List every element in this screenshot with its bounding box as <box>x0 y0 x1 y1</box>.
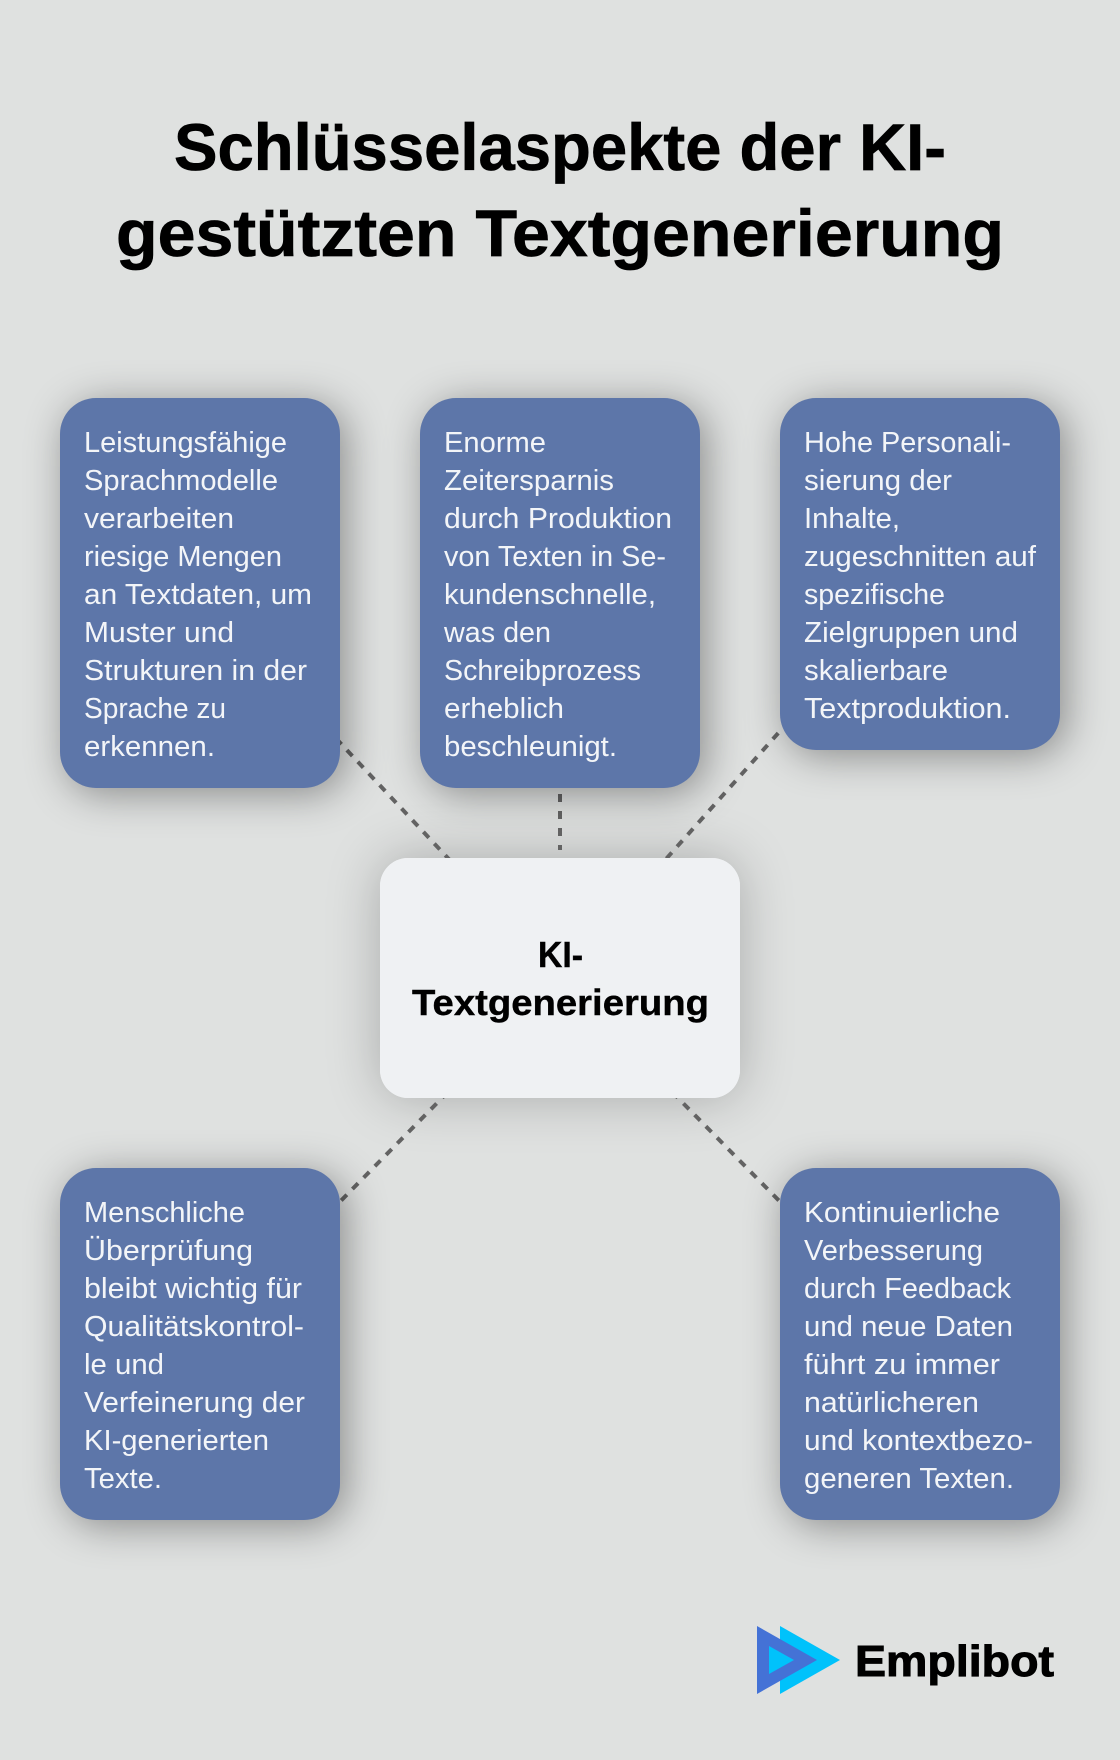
panel: Sprachmodelle: riesige Mengen <box>84 541 282 573</box>
panel: Kontinuierliche Verbesserung: und neue Daten <box>804 1311 1013 1343</box>
panel: Kontinuierliche Verbesserung: Verbesserung <box>804 1235 983 1267</box>
panel: Personalisierung: sierung der <box>804 465 953 497</box>
center node: KI-Textgenerierung <box>380 858 740 1098</box>
panel: Zeitersparnis: durch Produktion <box>444 503 672 535</box>
panel: Personalisierung: Inhalte, <box>804 503 900 535</box>
panel: Sprachmodelle: an Textdaten, um <box>84 579 312 611</box>
panel: Menschliche Überprüfung: le und <box>84 1349 164 1381</box>
panel: Menschliche Überprüfung: bleibt wichtig für <box>84 1273 303 1305</box>
panel: Personalisierung: spezifische <box>804 579 945 611</box>
panel: Sprachmodelle: Sprachmodelle <box>84 465 278 497</box>
panel: Menschliche Überprüfung: Texte. <box>84 1463 162 1495</box>
panel: Menschliche Überprüfung: Menschliche <box>84 1197 245 1229</box>
panel: Zeitersparnis: Schreibprozess <box>444 655 641 687</box>
panel: Menschliche Überprüfung: Qualitätskontrol- <box>84 1311 304 1343</box>
panel: Personalisierung: Hohe Personali- <box>804 427 1011 459</box>
center node: KI-Textgenerierung: Textgenerierung <box>412 982 709 1023</box>
title <box>116 110 1004 270</box>
panel: Kontinuierliche Verbesserung: generen Texten. <box>804 1463 1014 1495</box>
panel: Zeitersparnis: von Texten in Se- <box>444 541 666 573</box>
panel: Zeitersparnis: Zeitersparnis <box>444 465 614 497</box>
panel: Zeitersparnis: erheblich <box>444 693 564 725</box>
panel: Kontinuierliche Verbesserung: und kontextbezo- <box>804 1425 1033 1457</box>
center node: KI-Textgenerierung: KI- <box>538 934 583 975</box>
logo: Emplibot <box>757 1626 1054 1694</box>
panel: Menschliche Überprüfung <box>60 1168 340 1520</box>
panel: Personalisierung: Zielgruppen und <box>804 617 1018 649</box>
panel: Zeitersparnis: kundenschnelle, <box>444 579 656 611</box>
panel: Sprachmodelle: Sprache zu <box>84 693 226 725</box>
panel: Sprachmodelle: Strukturen in der <box>84 655 308 687</box>
panel: Kontinuierliche Verbesserung: durch Feedback <box>804 1273 1012 1305</box>
panel: Kontinuierliche Verbesserung: führt zu immer <box>804 1349 1001 1381</box>
panel: Personalisierung: Textproduktion. <box>804 693 1011 725</box>
panel: Kontinuierliche Verbesserung: Kontinuierliche <box>804 1197 1000 1229</box>
panel: Menschliche Überprüfung: Verfeinerung der <box>84 1387 306 1419</box>
panel: Zeitersparnis <box>420 398 700 788</box>
panel: Sprachmodelle: Leistungsfähige <box>84 427 287 459</box>
panel: Sprachmodelle: verarbeiten <box>84 503 234 535</box>
panel: Sprachmodelle: erkennen. <box>84 731 215 763</box>
title: gestützten Textgenerierung <box>116 196 1004 270</box>
center box shadow <box>380 858 740 1098</box>
panel: Menschliche Überprüfung: KI-generierten <box>84 1425 269 1457</box>
panel: Kontinuierliche Verbesserung <box>780 1168 1060 1520</box>
dashed connectors <box>200 574 920 1344</box>
panel: Zeitersparnis: beschleunigt. <box>444 731 617 763</box>
panel: Sprachmodelle: Muster und <box>84 617 234 649</box>
panel: Zeitersparnis: was den <box>443 617 551 649</box>
panel: Personalisierung: zugeschnitten auf <box>804 541 1036 573</box>
panel: Personalisierung: skalierbare <box>804 655 948 687</box>
panel: Zeitersparnis: Enorme <box>444 427 546 459</box>
panel: Menschliche Überprüfung: Überprüfung <box>84 1235 253 1267</box>
panel: Sprachmodelle <box>60 398 340 788</box>
panel: Personalisierung <box>780 398 1060 750</box>
title: Schlüsselaspekte der KI- <box>174 110 946 184</box>
panel: Kontinuierliche Verbesserung: natürlicheren <box>804 1387 979 1419</box>
logo: Emplibot: Emplibot <box>855 1637 1054 1686</box>
